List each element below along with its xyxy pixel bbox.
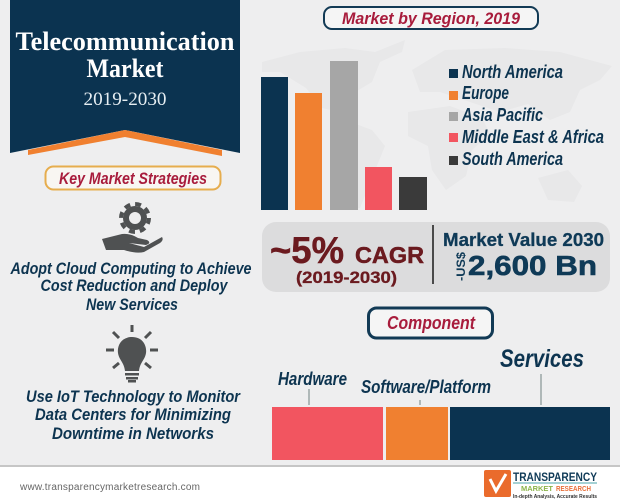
footer website: www.transparencymarketresearch.com — [19, 482, 200, 493]
component labels with leader lines: Hardware — [278, 369, 347, 389]
heading: component: Component — [387, 313, 476, 333]
legend: North America — [462, 62, 563, 82]
legend — [449, 62, 604, 169]
market value unit: -US$ — [454, 252, 468, 281]
panel: CAGR and market value — [262, 222, 610, 292]
component labels with leader lines: Services — [500, 345, 584, 373]
CAGR period: (2019-2030) — [296, 268, 397, 287]
background world map — [262, 40, 612, 208]
stacked bar: component share — [272, 407, 610, 460]
legend: South America — [462, 149, 563, 169]
text: IoT strategy: Data Centers for Minimizing — [35, 405, 232, 424]
icon: light bulb — [106, 325, 158, 382]
text: cloud computing strategy: Cost Reduction and Deploy — [40, 276, 229, 295]
legend: Europe — [462, 83, 509, 103]
title line two: Market — [86, 54, 164, 83]
logo subtitle: MARKET — [521, 486, 554, 493]
bar chart: market by region — [261, 61, 427, 210]
period: 2019-2030 — [84, 89, 166, 110]
text: cloud computing strategy — [10, 259, 251, 314]
heading: market by region: Market by Region, 2019 — [342, 9, 521, 28]
logo name: TRANSPARENCY — [513, 470, 597, 484]
component labels with leader lines — [278, 345, 584, 405]
text: IoT strategy: Downtime in Networks — [52, 424, 214, 443]
title banner — [10, 0, 240, 156]
component labels with leader lines: Software/Platform — [361, 377, 491, 397]
text: cloud computing strategy: New Services — [86, 295, 178, 314]
CAGR value: ~5% — [270, 230, 344, 271]
logo — [484, 470, 597, 500]
text: cloud computing strategy: Adopt Cloud Computing to Achieve — [10, 259, 251, 278]
title: Telecommunication — [16, 27, 235, 56]
text: IoT strategy: Use IoT Technology to Monitor — [26, 387, 241, 406]
CAGR label: CAGR — [355, 242, 424, 268]
logo: RESEARCH — [556, 486, 591, 493]
logo tagline: In-depth Analysis, Accurate Results — [513, 494, 597, 500]
legend: Asia Pacific — [461, 105, 543, 125]
logo mark — [484, 470, 511, 497]
banner orange chevron — [28, 130, 222, 156]
market value: 2,600 Bn — [468, 250, 597, 281]
heading: key market strategies: Key Market Strategies — [59, 169, 207, 188]
heading: component — [368, 308, 492, 338]
icon: hand holding gear — [102, 204, 163, 253]
text: IoT strategy — [26, 387, 241, 443]
market value label: Market Value 2030 — [443, 230, 604, 250]
